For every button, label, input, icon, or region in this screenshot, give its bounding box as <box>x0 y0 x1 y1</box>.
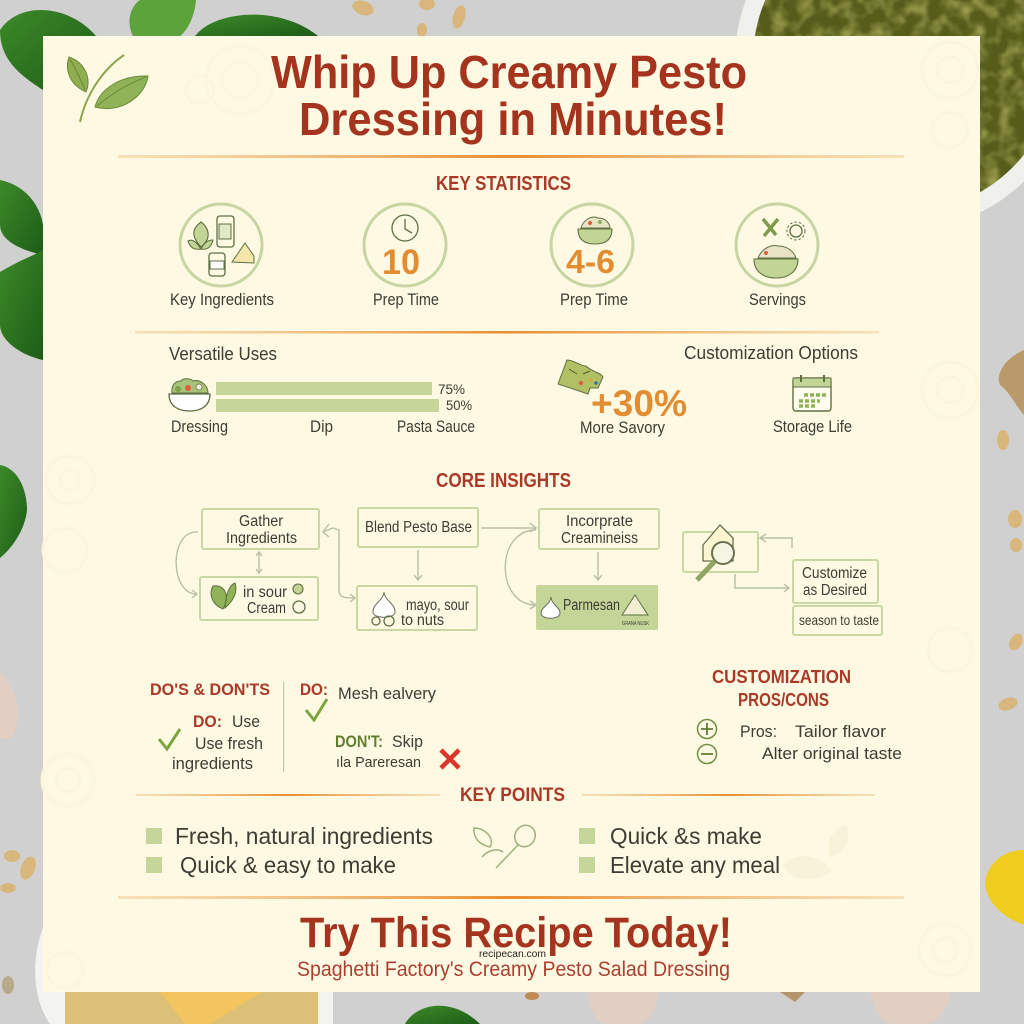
box: gather ingredients: Ingredients <box>226 530 297 547</box>
stat: prep time 10 <box>364 204 446 309</box>
box: mayo, sour to nuts: mayo, sour <box>406 597 469 614</box>
box: parmesan: GRANA NUSK <box>622 621 650 627</box>
box: mayo, sour to nuts: to nuts <box>401 612 444 629</box>
pesto bowl <box>735 0 1024 230</box>
list: key points: Fresh, natural ingredients <box>175 823 433 849</box>
ginger root <box>999 350 1024 415</box>
box: incorporate creaminess: Incorprate <box>566 513 633 530</box>
box: season to taste: season to taste <box>799 612 879 628</box>
panel: customization pros and cons: Alter original taste <box>762 744 902 763</box>
lemon <box>985 850 1024 925</box>
call to action: Try This Recipe Today! <box>300 909 732 957</box>
call to action <box>297 909 732 981</box>
basil leaves <box>0 0 480 1024</box>
box: in sour cream: in sour <box>243 584 287 601</box>
panel: do's and don'ts: DON'T: <box>335 732 383 751</box>
stat: key ingredients: Key Ingredients <box>170 291 274 309</box>
panel: customization pros and cons: PROS/CONS <box>738 690 829 710</box>
panel: do's and don'ts: ingredients <box>172 754 253 773</box>
box: in sour cream: Cream <box>247 600 286 617</box>
box: customize as desired <box>793 560 878 603</box>
stat: prep time 4-6: 4-6 <box>566 243 615 280</box>
box: customize as desired: Customize <box>802 565 867 582</box>
panel: do's and don'ts: Skip <box>392 732 423 751</box>
box: parmesan <box>536 585 658 630</box>
panel: do's and don'ts: Mesh ealvery <box>338 684 436 703</box>
panel: customization pros and cons: Pros: <box>740 722 777 741</box>
box: mayo, sour to nuts <box>357 586 477 630</box>
stat: servings: Servings <box>749 291 806 309</box>
panel: customization pros and cons: CUSTOMIZATION <box>712 667 851 687</box>
box: blend pesto base: Blend Pesto Base <box>365 519 472 536</box>
stat: servings <box>736 204 818 309</box>
chart: versatile uses: Versatile Uses <box>169 343 277 364</box>
icon: calendar <box>793 375 831 411</box>
block: customization options and storage life <box>684 342 858 436</box>
faint leaf <box>782 824 848 879</box>
icon: salad bowl <box>169 379 210 411</box>
panel: do's and don'ts: Use fresh <box>195 734 263 753</box>
list: key points <box>146 821 848 879</box>
chart: versatile uses: Dip <box>310 418 333 436</box>
chart: versatile uses: Dressing <box>171 418 228 436</box>
panel: do's and don'ts: DO'S & DON'TS <box>150 680 270 699</box>
stat: prep time 10: 10 <box>382 243 420 282</box>
heading: key statistics: KEY STATISTICS <box>436 172 571 195</box>
flowchart: core insights <box>176 508 882 635</box>
parmesan bowl <box>35 925 333 1024</box>
box: customize as desired: as Desired <box>803 582 867 599</box>
block: customization options and storage life: Storage Life <box>773 418 852 436</box>
list: key points: Elevate any meal <box>610 852 780 878</box>
icon: check <box>306 699 327 720</box>
heading: core insights: CORE INSIGHTS <box>436 469 571 492</box>
chart: versatile uses: Pasta Sauce <box>397 418 475 436</box>
box: gather ingredients: Gather <box>239 513 283 530</box>
chart: versatile uses: 50% <box>446 397 472 413</box>
icon: cheese wedge <box>558 360 603 394</box>
title <box>271 46 747 145</box>
box: incorporate creaminess <box>539 509 659 549</box>
panel: do's and don'ts: DO: <box>193 712 222 731</box>
panel: customization pros and cons: Tailor flavor <box>795 722 886 741</box>
arrows <box>176 523 792 609</box>
watermark: recipecan.com: recipecan.com <box>479 949 546 960</box>
panel: do's and don'ts: Use <box>232 712 260 731</box>
box: season to taste <box>793 606 882 635</box>
icon: minus <box>698 744 716 764</box>
chart: versatile uses <box>169 343 475 436</box>
stat: prep time 4-6: Prep Time <box>560 291 628 309</box>
icon: check <box>159 729 180 749</box>
stat: prep time 10: Prep Time <box>373 291 439 309</box>
bar: 50% <box>216 399 439 412</box>
title: Whip Up Creamy Pesto <box>271 46 747 98</box>
panel: do's and don'ts: ıla Parеresan <box>336 754 421 771</box>
stat: more savory: More Savory <box>580 419 666 437</box>
box: in sour cream <box>200 577 318 620</box>
box: incorporate creaminess: Creamineiss <box>561 530 638 547</box>
box: blend pesto base <box>358 508 478 547</box>
stat: more savory <box>558 360 687 437</box>
icon: herb and spoon <box>474 821 539 868</box>
panel: do's and don'ts <box>150 680 459 773</box>
bar: 75% <box>216 382 432 395</box>
stat: key ingredients <box>170 204 274 309</box>
garlic <box>0 672 950 1024</box>
stat: more savory: +30% <box>591 383 687 424</box>
list: key points: Quick &s make <box>610 823 762 849</box>
stat: prep time 4-6 <box>551 204 633 309</box>
call to action: Spaghetti Factory's Creamy Pesto Salad Dressing <box>297 958 730 981</box>
panel: do's and don'ts: DO: <box>300 680 328 699</box>
block: customization options and storage life: Customization Options <box>684 342 858 363</box>
chart: versatile uses: 75% <box>438 381 465 397</box>
icon: plus <box>698 720 716 738</box>
list: key points: Quick & easy to make <box>180 852 396 878</box>
title: Dressing in Minutes! <box>299 93 727 145</box>
heading: key points: KEY POINTS <box>460 785 565 806</box>
icon: red cross <box>441 750 459 768</box>
icon: basil sprig <box>67 55 148 122</box>
box: parmesan: Parmesan <box>563 597 620 614</box>
box: gather ingredients <box>202 509 319 549</box>
box: cheese magnifier <box>683 525 758 580</box>
panel: customization pros and cons <box>698 667 902 764</box>
